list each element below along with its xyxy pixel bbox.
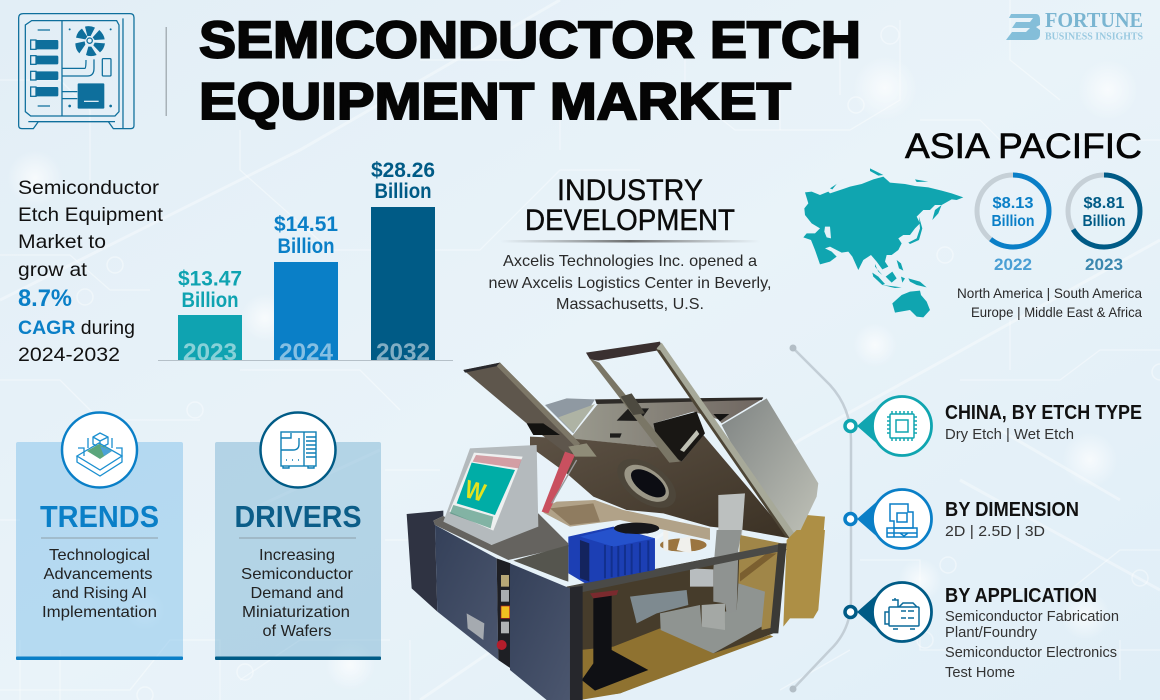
logo: Fortune Business Insights <box>1006 8 1143 42</box>
bar: 2032: 2032 <box>376 339 430 366</box>
panel: drivers: DRIVERS <box>234 499 362 534</box>
CAGR statement: 8.7% <box>18 285 72 312</box>
machine interior <box>567 530 825 700</box>
heading: industry development: INDUSTRY <box>557 174 703 207</box>
ring: 2022 value: Billion <box>992 213 1034 230</box>
blue power unit <box>568 523 707 583</box>
panel: drivers: Increasing <box>259 547 335 564</box>
bar: 2024: $14.51 <box>274 212 338 236</box>
panel: drivers: Semiconductor <box>241 566 354 583</box>
machine lid assembly <box>463 342 825 553</box>
panel: trends <box>16 412 183 660</box>
CAGR statement <box>18 177 164 366</box>
bar: 2032: $28.26 <box>371 158 435 182</box>
map: Asia Pacific <box>803 168 963 317</box>
text: other regions: Europe | Middle East & Africa <box>971 304 1142 320</box>
heading: industry development <box>525 174 735 237</box>
panel: drivers: of Wafers <box>262 623 332 640</box>
panel: drivers <box>215 412 381 660</box>
text: industry development: Massachusetts, U.S. <box>556 296 704 313</box>
icon: drivers <box>260 412 336 488</box>
segment: by application: Test Home <box>945 664 1015 681</box>
bar: 2023: $13.47 <box>178 266 242 290</box>
title: SEMICONDUCTOR ETCH <box>199 12 861 70</box>
bar: 2023: 2023 <box>183 339 237 366</box>
segment: by application <box>845 582 1119 681</box>
panel: trends: TRENDS <box>40 499 159 534</box>
text: other regions <box>957 285 1142 320</box>
segment: by application: BY APPLICATION <box>945 585 1097 607</box>
bar: 2024: Billion <box>278 234 334 258</box>
panel: trends: Technological <box>49 547 150 564</box>
icon: etch equipment cabinet <box>19 14 134 129</box>
segment: by dimension: 2D | 2.5D | 3D <box>945 523 1045 540</box>
cabinet and control panel <box>407 511 583 700</box>
logo: Fortune Business Insights: BUSINESS INSIGHTS <box>1045 32 1143 42</box>
segment: by dimension: BY DIMENSION <box>945 499 1079 521</box>
CAGR statement: Market to <box>18 231 106 253</box>
bar: 2024: 2024 <box>279 339 334 366</box>
text: industry development: new Axcelis Logistics Center in Beverly, <box>488 275 772 292</box>
ring: 2023 value: 2023 <box>1085 255 1123 274</box>
text: other regions: North America | South America <box>957 285 1142 301</box>
logo: Fortune Business Insights: FORTUNE <box>1045 8 1143 32</box>
icon: circuit board <box>887 504 917 537</box>
CAGR statement: grow at <box>18 259 88 281</box>
bar: 2023 <box>178 266 242 366</box>
panel: drivers: Demand and <box>250 585 344 602</box>
ring: 2022 value: 2022 <box>994 255 1032 274</box>
machine: etch equipment photo <box>407 342 825 700</box>
segment: China by etch type <box>845 396 1142 456</box>
heading: Asia Pacific: ASIA PACIFIC <box>905 127 1142 166</box>
panel: trends: and Rising AI <box>52 585 147 602</box>
segment: China by etch type: Dry Etch | Wet Etch <box>945 426 1074 443</box>
text: industry development <box>488 253 772 313</box>
panel: drivers: Miniaturization <box>242 604 350 621</box>
panel: trends: Implementation <box>42 604 157 621</box>
text: industry development: Axcelis Technologies Inc. opened a <box>503 253 757 270</box>
segment: by application: Plant/Foundry <box>945 624 1037 641</box>
ring: 2023 value: $8.81 <box>1084 195 1125 212</box>
CAGR statement: 2024-2032 <box>18 344 120 366</box>
segment: by dimension <box>845 490 1079 548</box>
title: EQUIPMENT MARKET <box>199 73 791 131</box>
connector line <box>790 344 851 692</box>
ring: 2022 value <box>977 175 1049 274</box>
segment: by application: Semiconductor Electronics <box>945 644 1117 661</box>
monitor <box>443 445 538 545</box>
icon: trends <box>62 412 137 488</box>
icon: chip <box>887 411 917 441</box>
bar: 2024 <box>274 212 338 366</box>
bar: 2023: Billion <box>182 288 238 312</box>
heading: industry development: DEVELOPMENT <box>525 204 735 237</box>
bar: 2032 <box>371 158 435 366</box>
icon: fabrication machine <box>885 598 919 629</box>
CAGR statement: Etch Equipment <box>18 204 164 226</box>
ring: 2022 value: $8.13 <box>992 195 1034 212</box>
title <box>199 12 861 131</box>
bar: 2032: Billion <box>374 179 432 203</box>
ring: 2023 value: Billion <box>1082 213 1126 230</box>
bar chart <box>158 158 453 366</box>
CAGR statement: CAGR during <box>18 317 135 339</box>
ring: 2023 value <box>1068 175 1140 274</box>
monitor: W <box>462 475 488 508</box>
panel: trends: Advancements <box>44 566 152 583</box>
CAGR statement: Semiconductor <box>18 177 160 199</box>
segment: China by etch type: CHINA, BY ETCH TYPE <box>945 402 1142 424</box>
segment: by application: Semiconductor Fabrication <box>945 608 1119 625</box>
